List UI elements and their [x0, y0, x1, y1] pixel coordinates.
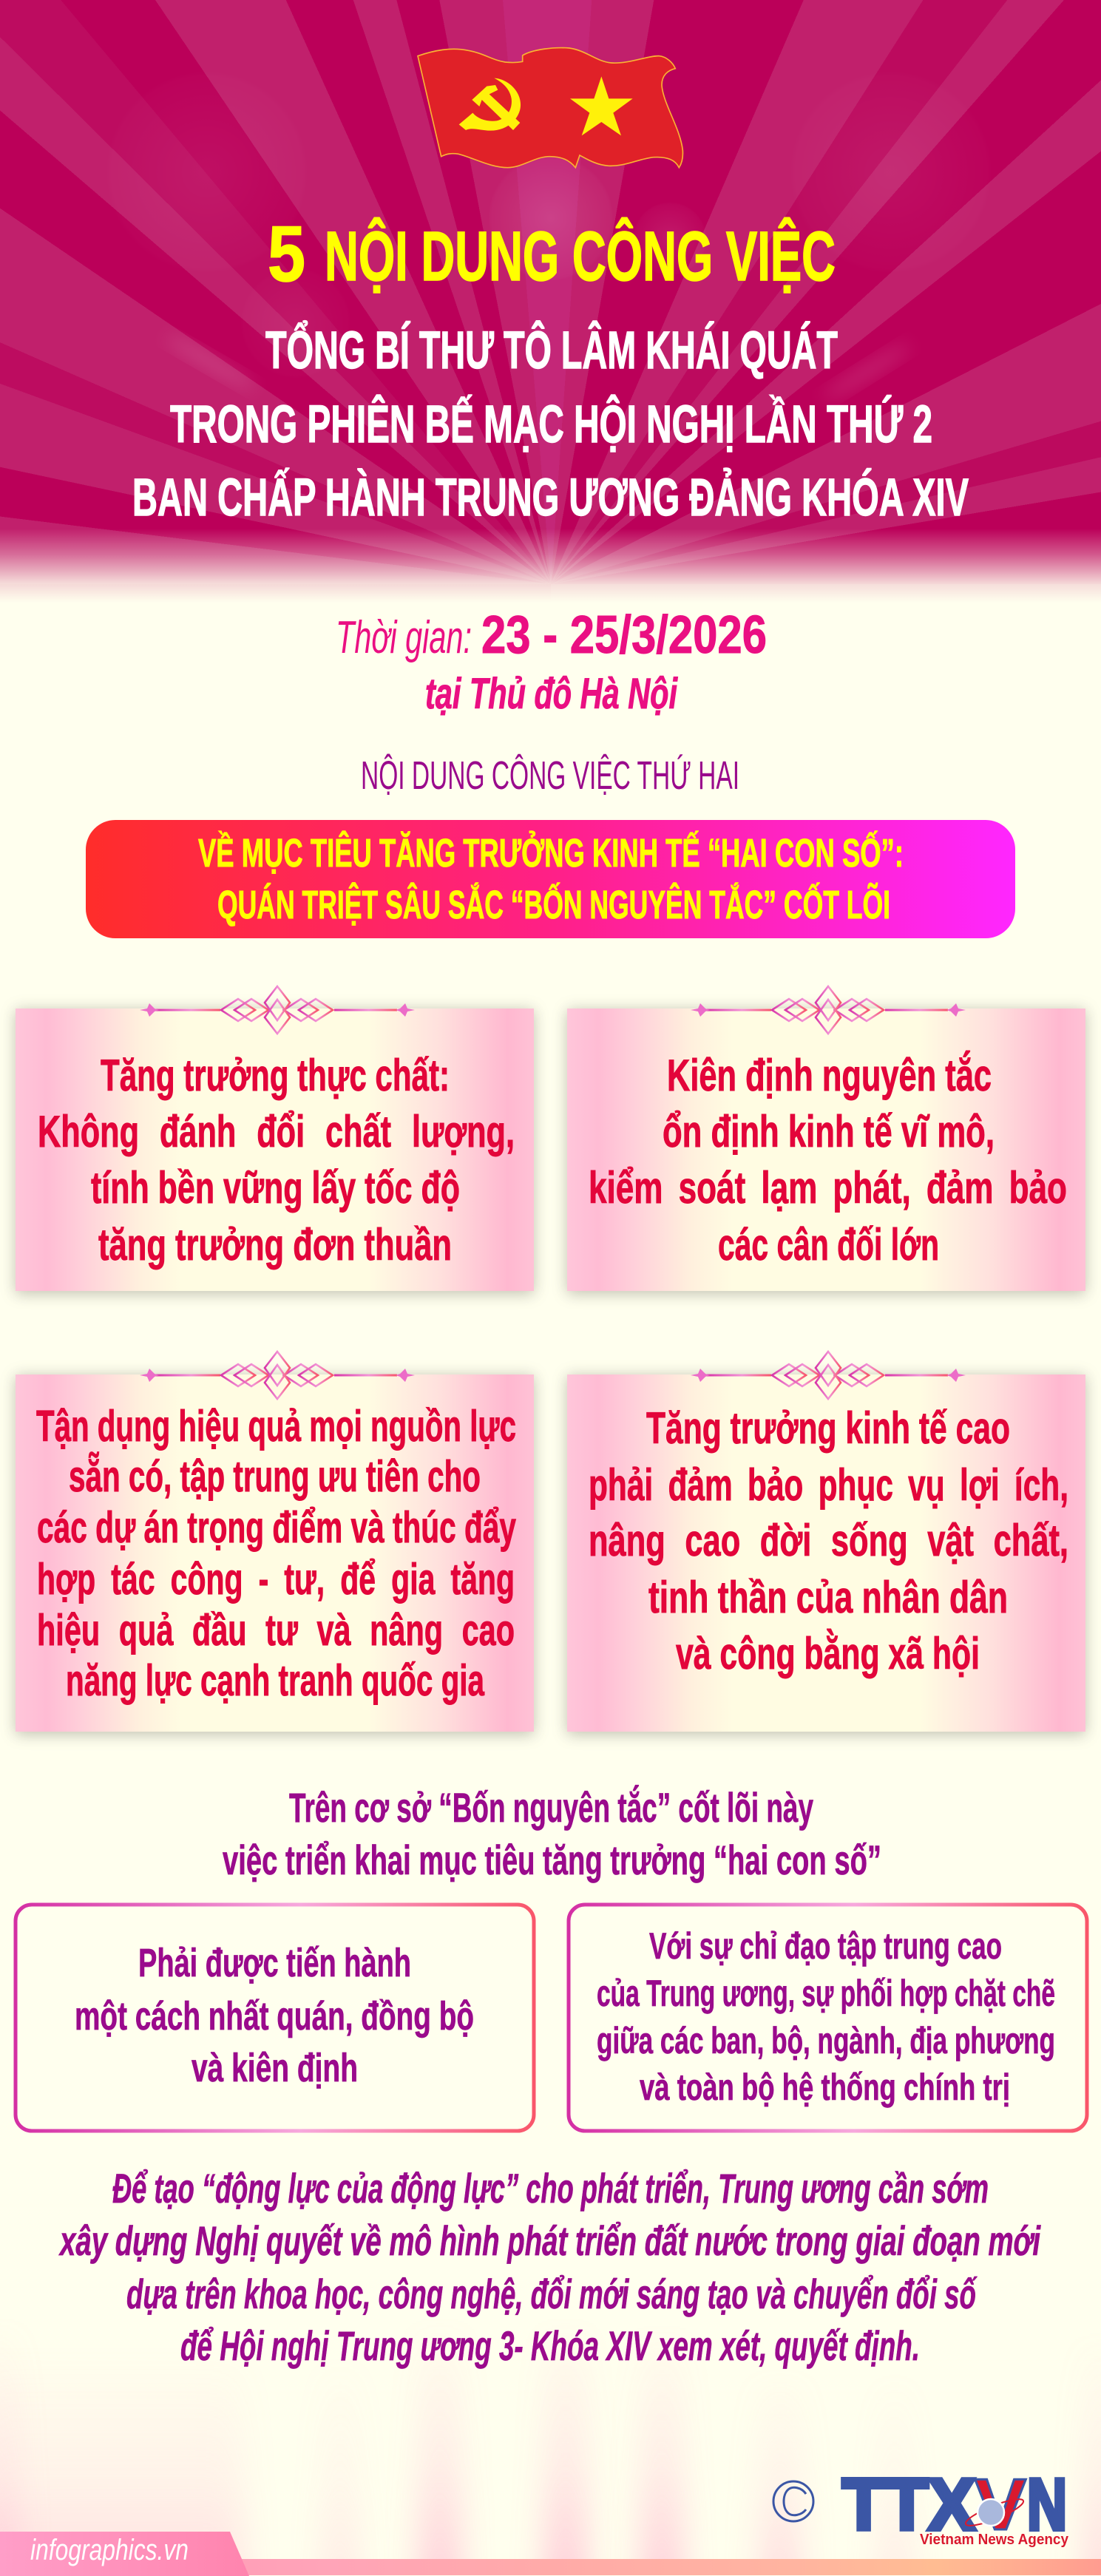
logo: TTXVN: Vietnam News Agency — [920, 2532, 1069, 2548]
header fade into cream — [0, 0, 1101, 603]
panel: card 1: Tăng trưởng thực chất: — [101, 1051, 450, 1100]
section label: NỘI DUNG CÔNG VIỆC THỨ HAI — [361, 753, 739, 798]
footer tab with source — [0, 2532, 249, 2576]
date and place: Thời gian: — [336, 612, 472, 663]
panel: card 3: năng lực cạnh tranh quốc gia — [66, 1656, 485, 1705]
panel: card 1: Không đánh đổi chất lượng, — [38, 1107, 515, 1156]
panel: card 4: và công bằng xã hội — [676, 1629, 980, 1678]
panel: outlined box right — [569, 1905, 1087, 2131]
logo: TTXVN: V — [975, 2464, 1026, 2545]
panel: outlined box left: Phải được tiến hành — [138, 1941, 411, 1985]
panel: card 2 — [567, 986, 1085, 1294]
panel: card 3 — [16, 1352, 534, 1735]
bottom pink streaks background — [0, 2314, 1101, 2566]
logo: TTXVN: TTX — [842, 2464, 975, 2545]
date and place — [336, 606, 767, 718]
panel: outlined box left — [16, 1905, 534, 2131]
panel: card 1 — [16, 986, 534, 1294]
icon: copyright — [773, 2481, 813, 2521]
title — [268, 209, 836, 298]
panel: card 3: sẵn có, tập trung ưu tiên cho — [69, 1451, 481, 1501]
text block: intro to implementation — [223, 1784, 881, 1883]
date and place: tại Thủ đô Hà Nội — [425, 670, 678, 718]
logo: TTXVN — [842, 2464, 1069, 2548]
text block: closing statement — [58, 2165, 1041, 2369]
title: NỘI DUNG CÔNG VIỆC — [325, 217, 836, 296]
header soft glows — [106, 71, 992, 405]
panel: card 1: tính bền vững lấy tốc độ — [91, 1163, 460, 1213]
panel: outlined box left: một cách nhất quán, đồng bộ — [75, 1994, 474, 2038]
panel: card 1: tăng trưởng đơn thuần — [98, 1220, 452, 1270]
footer band — [0, 2559, 1101, 2575]
subtitle — [132, 321, 969, 527]
panel: card 3: hợp tác công - tư, để gia tăng — [37, 1555, 515, 1604]
footer tab with source: infographics.vn — [30, 2534, 189, 2566]
text block: intro to implementation: Trên cơ sở “Bốn nguyên tắc” cốt lõi này — [289, 1784, 813, 1831]
panel: card 2: các cân đối lớn — [718, 1220, 939, 1270]
panel: card 3: hiệu quả đầu tư và nâng cao — [37, 1606, 515, 1655]
panel: card 3: các dự án trọng điểm và thúc đẩy — [37, 1503, 516, 1552]
header background with rays — [0, 0, 1101, 603]
panel: outlined box left: và kiên định — [192, 2046, 358, 2090]
date and place: 23 - 25/3/2026 — [481, 606, 767, 665]
panel: card 4 — [567, 1352, 1085, 1735]
logo: TTXVN: N — [1027, 2464, 1067, 2545]
panel: card 3: Tận dụng hiệu quả mọi nguồn lực — [36, 1402, 516, 1451]
banner — [86, 820, 1015, 938]
icon: party flag — [418, 48, 682, 168]
title: 5 — [268, 209, 305, 298]
